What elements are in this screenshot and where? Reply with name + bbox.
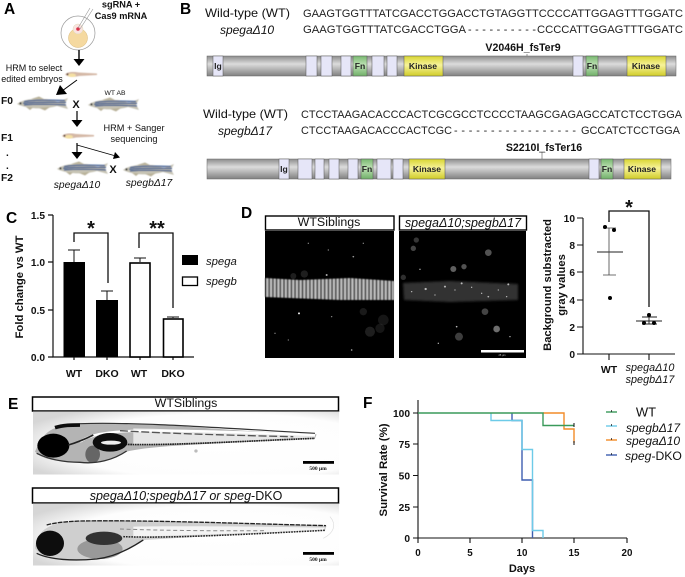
HRM selection text: HRM to select — [6, 63, 63, 73]
curve: spegb — [491, 413, 543, 538]
bars — [64, 262, 183, 357]
spega protein domain bar: Fn — [355, 61, 365, 71]
arrow — [74, 50, 84, 66]
panel label F: F — [363, 395, 372, 412]
mutation label spega: V2046H_fsTer9 — [485, 42, 561, 54]
y axis title: gray values — [556, 254, 568, 316]
curve: spega — [543, 413, 574, 443]
y tick labels: 100 — [393, 409, 410, 420]
micrograph: WT larva: 500 μm — [309, 466, 327, 472]
micrograph DKO: 25 μm — [498, 354, 506, 357]
legend: spegbΔ17 — [626, 421, 681, 435]
panel: E larva images — [8, 396, 339, 566]
icon: spegb fish — [123, 162, 174, 176]
header spega spegb: spegaΔ10;spegbΔ17 — [405, 216, 522, 230]
y tick labels: 2 — [569, 323, 575, 334]
y tick labels: 8 — [569, 241, 575, 252]
spegb sequence alignment: CTCCTAAGACACCCACTCGC — [301, 125, 452, 137]
y tick labels: 0 — [404, 534, 410, 545]
header WT Siblings — [32, 396, 338, 411]
y tick labels — [31, 211, 45, 364]
WT mean and error — [597, 251, 623, 253]
dot plot — [542, 197, 675, 386]
spega protein domain bar: Ig — [214, 61, 222, 71]
panel: B sequences and domains — [180, 1, 683, 179]
spega sequence alignment: Wild-type (WT) — [205, 6, 290, 20]
significance brackets: * — [87, 218, 95, 240]
significance brackets: ** — [149, 218, 165, 240]
x tick labels: 0 — [415, 548, 421, 559]
spega sequence alignment: GAAGTGGTTTATCGACCTGGA — [303, 24, 467, 36]
spegb protein domain bar: Kinase — [413, 164, 441, 174]
micrograph: DKO larva: 500 μm — [309, 557, 327, 563]
censor ticks — [573, 423, 575, 445]
spegb protein domain bar: Fn — [602, 164, 612, 174]
y tick labels — [393, 409, 410, 545]
y tick labels: 10 — [564, 214, 575, 225]
spega sequence alignment: GAAGTGGTTTATCGACCTGGACCTGTAGGTTCCCCATTGGAGTTTGGATC — [303, 8, 683, 20]
y axis title: Fold change vs WT — [14, 235, 26, 338]
x labels: spegbΔ17 — [626, 374, 675, 386]
legend: speg-DKO — [625, 449, 682, 463]
spegb protein domain bar: Fn — [362, 164, 372, 174]
sgRNA text: Cas9 mRNA — [95, 11, 148, 21]
spegb sequence alignment: Wild-type (WT) — [203, 107, 288, 121]
spega label: spegaΔ10 — [54, 180, 100, 191]
legend — [182, 255, 237, 288]
legend: spegaΔ10 — [626, 434, 680, 448]
panel: A zebrafish breeding scheme — [1, 0, 174, 191]
icon: larva — [65, 72, 97, 77]
generation dots: . — [6, 148, 9, 159]
legend: spega — [206, 256, 237, 268]
y axis title: Background substracted — [542, 219, 554, 351]
y tick labels: 6 — [569, 268, 575, 279]
x labels: spegaΔ10 — [626, 362, 674, 374]
spegb sequence alignment: GCCATCTCCTGGA — [581, 125, 681, 137]
label F0: F0 — [1, 96, 13, 107]
panel label E: E — [8, 396, 18, 413]
x tick labels: WT — [131, 368, 148, 380]
arrow — [72, 111, 82, 127]
axes — [413, 400, 627, 543]
mutation label spegb: S2210I_fsTer16 — [506, 142, 582, 154]
WT AB label: WT AB — [104, 90, 126, 97]
spega protein domain bar: Fn — [587, 61, 597, 71]
micrograph WT — [265, 231, 394, 358]
spegb sequence alignment: - - - - - - - - - - - - - - - - - — [454, 125, 576, 137]
axes — [577, 218, 675, 360]
spega sequence alignment — [205, 6, 683, 37]
header DKO — [32, 488, 338, 503]
y tick labels: 75 — [399, 440, 410, 451]
curve: speg-DKO — [512, 413, 532, 538]
cross mark: X — [109, 164, 117, 176]
spegb sequence alignment — [203, 107, 683, 138]
icon: WT fish — [88, 98, 139, 112]
x axis title: Days — [509, 563, 535, 575]
icon: spega fish — [57, 162, 108, 176]
significance brackets — [74, 218, 173, 308]
spegb protein domain bar: Kinase — [628, 164, 656, 174]
curve: WT — [418, 413, 574, 426]
significance bracket: * — [625, 197, 633, 219]
header DKO: spegaΔ10;spegbΔ17 or speg-DKO — [90, 489, 283, 503]
x tick labels: 10 — [517, 548, 528, 559]
data points — [603, 225, 656, 325]
panel label C: C — [6, 210, 17, 227]
arrow — [77, 145, 120, 159]
spegb protein domain bar: Ig — [280, 164, 288, 174]
y tick labels — [564, 214, 575, 361]
y tick labels: 1.5 — [31, 211, 45, 222]
y tick labels: 1.0 — [31, 258, 45, 269]
spega protein domain bar: Kinase — [632, 61, 660, 71]
y tick labels: 0.5 — [31, 306, 45, 317]
icon: injected embryo — [61, 8, 95, 50]
error bars — [68, 250, 179, 318]
sequencing text: sequencing — [110, 134, 158, 144]
header WT Siblings: WTSiblings — [298, 215, 360, 229]
panel label A: A — [4, 1, 15, 18]
x tick labels: 15 — [569, 548, 580, 559]
sequencing text: HRM + Sanger — [103, 123, 165, 133]
panel label B: B — [180, 1, 191, 18]
x tick labels — [415, 548, 633, 559]
spega sequence alignment: CCCCATTGGAGTTTGGATC — [537, 24, 683, 36]
label F2: F2 — [1, 173, 13, 184]
spegb label: spegbΔ17 — [126, 178, 173, 189]
arrow — [56, 80, 77, 95]
cross mark: X — [72, 99, 80, 111]
DKO mean and error — [636, 317, 662, 324]
x tick labels: DKO — [161, 368, 185, 380]
y axis title: Survival Rate (%) — [378, 423, 390, 517]
y tick labels: 4 — [569, 296, 575, 307]
spega protein domain bar — [207, 54, 676, 76]
spegb sequence alignment: CTCCTAAGACACCCACTCGCGCCTCCCCTAAGCGAGAGCCATCTCCTGGA — [301, 109, 683, 121]
x labels — [601, 362, 675, 386]
icon: F1 larva — [62, 133, 94, 139]
panel label D: D — [241, 205, 252, 222]
WT error bar — [603, 228, 616, 275]
header WT Siblings: WTSiblings — [155, 396, 217, 410]
spegb protein domain bar — [207, 152, 671, 179]
icon: F0 fish — [17, 96, 68, 110]
generation dots: . — [6, 161, 9, 172]
label F1: F1 — [1, 133, 13, 144]
legend: WT — [636, 404, 656, 420]
micrograph DKO — [399, 231, 526, 358]
significance bracket — [609, 197, 649, 307]
panel: F survival curve — [363, 395, 682, 575]
axes — [48, 215, 194, 360]
x tick labels — [66, 368, 185, 380]
x tick labels: 5 — [467, 548, 473, 559]
y tick labels: 0 — [569, 350, 575, 361]
y tick labels: 25 — [399, 503, 410, 514]
panel: C bar chart — [6, 210, 237, 380]
y tick labels: 0.0 — [31, 353, 45, 364]
spega sequence alignment: - - - - - - - - - - — [468, 24, 536, 36]
panel: D microscopy and dot plot — [241, 197, 675, 386]
x tick labels: WT — [66, 368, 83, 380]
micrograph: DKO larva — [33, 504, 339, 566]
x tick labels: 20 — [622, 548, 633, 559]
legend — [606, 404, 682, 463]
spegb sequence alignment: spegbΔ17 — [218, 124, 273, 138]
legend: spegb — [206, 276, 237, 288]
spega protein domain bar: Kinase — [409, 61, 437, 71]
micrograph: WT larva — [33, 412, 339, 474]
spega sequence alignment: spegaΔ10 — [220, 23, 274, 37]
header WT Siblings — [266, 215, 394, 230]
arrow — [72, 143, 82, 159]
x tick labels: DKO — [95, 368, 119, 380]
y tick labels: 50 — [399, 472, 410, 482]
HRM selection text: edited embryos — [1, 74, 63, 84]
x labels: WT — [601, 364, 618, 376]
